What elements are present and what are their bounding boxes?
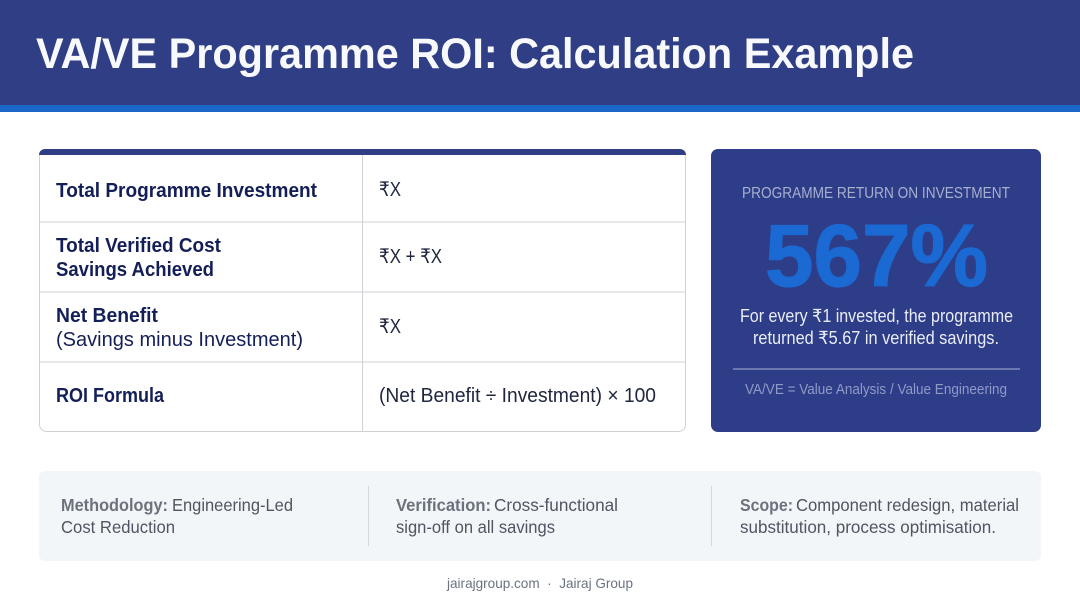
panel heading: PROGRAMME RETURN ON INVESTMENT <box>742 185 1010 202</box>
row: total programme investment: ₹X <box>379 179 401 201</box>
header banner <box>0 0 1080 112</box>
row: total verified cost savings: ₹X + ₹X <box>379 246 442 268</box>
panel: notes strip <box>39 471 1041 561</box>
row: total programme investment: Total Programme Investment <box>56 180 317 202</box>
note: scope <box>740 495 1019 537</box>
note: verification: sign-off on all savings <box>396 517 555 537</box>
note: verification: Verification: <box>396 495 491 515</box>
row: total verified cost savings <box>56 235 442 281</box>
row: ROI formula <box>56 385 656 407</box>
note: verification: Cross-functional <box>494 495 618 515</box>
explanation text: For every ₹1 invested, the programme <box>740 306 1013 326</box>
note: scope: Scope: <box>740 495 793 515</box>
row: net benefit: ₹X <box>379 316 401 338</box>
note: verification <box>396 495 618 537</box>
row: ROI formula: (Net Benefit ÷ Investment) × 100 <box>379 385 656 407</box>
abbreviation note: VA/VE = Value Analysis / Value Engineering <box>745 382 1007 398</box>
row: net benefit <box>56 305 401 351</box>
note: methodology: Cost Reduction <box>61 517 175 537</box>
panel: calculation table <box>39 149 686 432</box>
note: methodology <box>61 495 293 537</box>
big number 567%: 567% <box>765 206 988 305</box>
note: scope: substitution, process optimisation. <box>740 517 996 537</box>
explanation text <box>740 306 1013 348</box>
row: total verified cost savings: Savings Achieved <box>56 259 214 281</box>
row: ROI formula: ROI Formula <box>56 385 165 407</box>
row: total verified cost savings: Total Verified Cost <box>56 235 221 257</box>
panel: ROI result <box>711 149 1041 432</box>
explanation text: returned ₹5.67 in verified savings. <box>753 328 999 348</box>
row: net benefit: (Savings minus Investment) <box>56 329 303 351</box>
note: methodology: Engineering-Led <box>172 495 293 515</box>
note: scope: Component redesign, material <box>796 495 1019 515</box>
note: methodology: Methodology: <box>61 495 168 515</box>
row: net benefit: Net Benefit <box>56 305 158 327</box>
title: VA/VE Programme ROI: Calculation Example <box>36 30 914 78</box>
footer: jairajgroup.com · Jairaj Group <box>446 575 633 591</box>
